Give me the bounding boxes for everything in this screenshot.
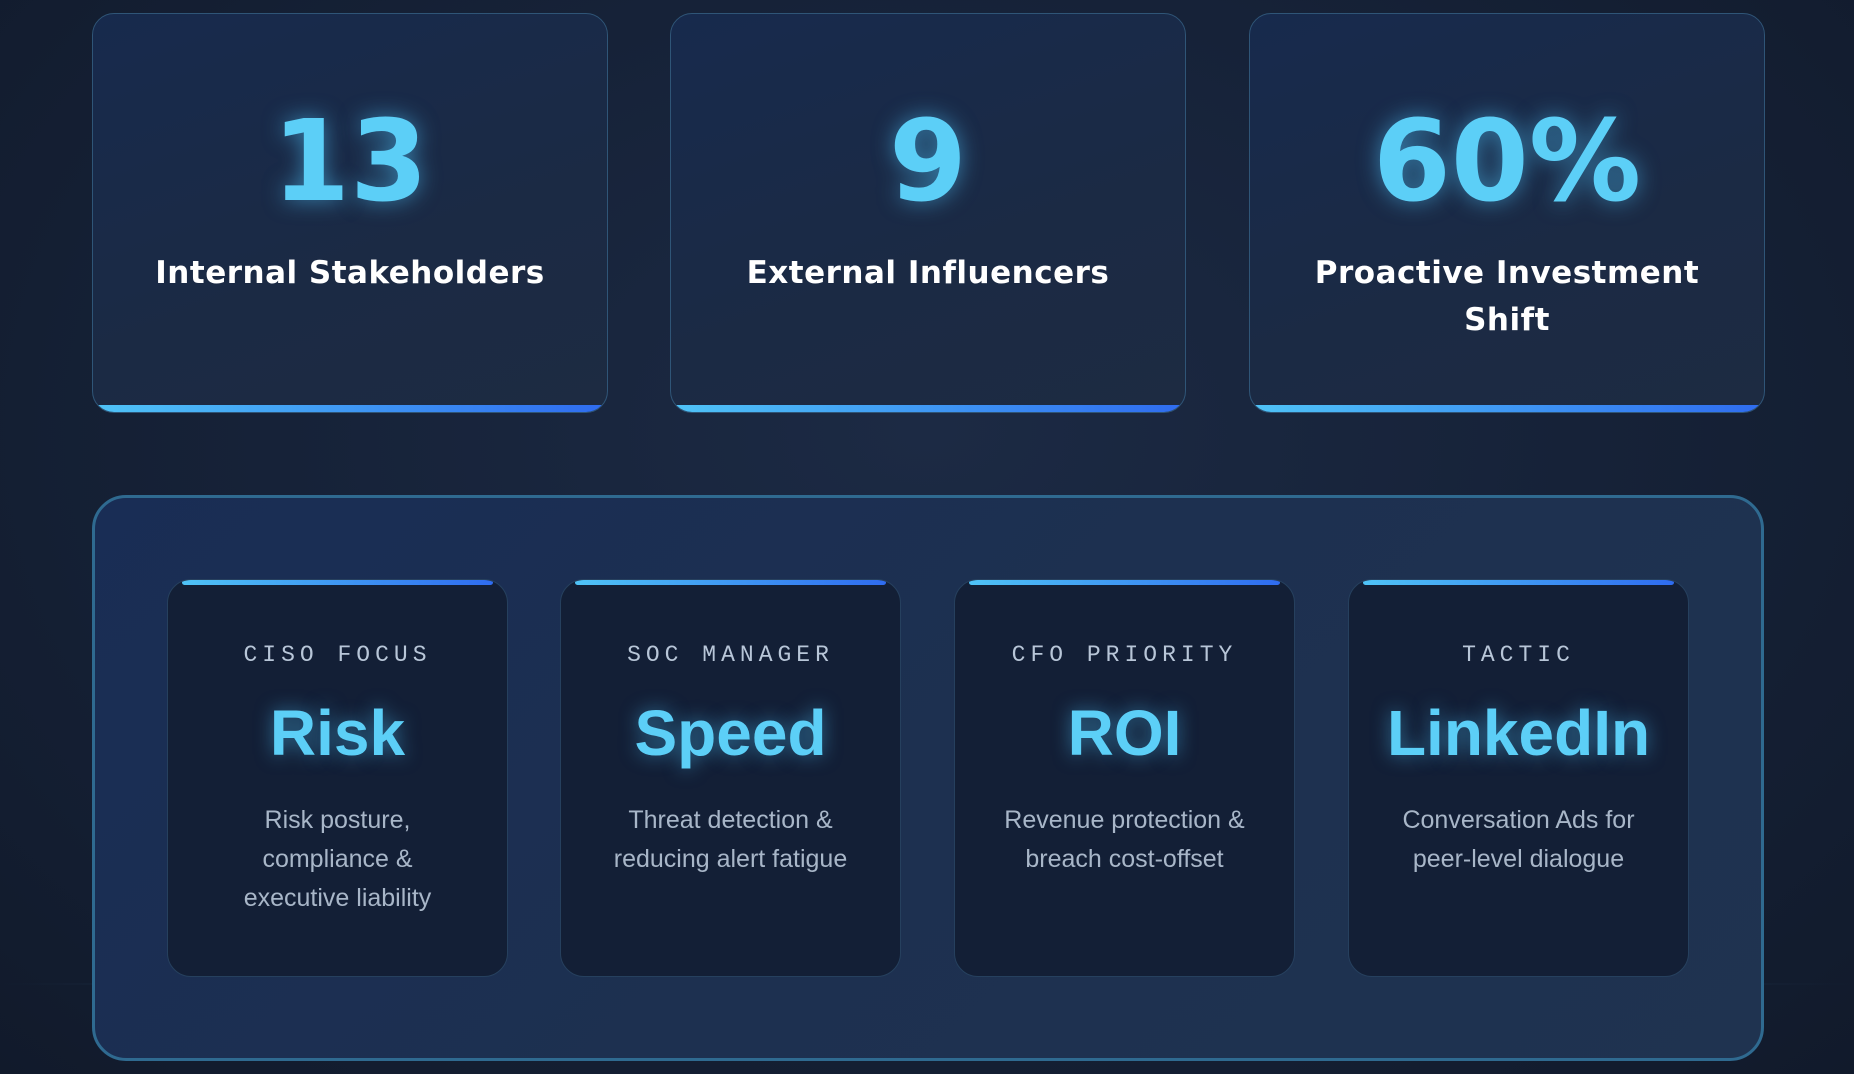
card: SOC manager: Speed bbox=[634, 697, 827, 769]
card: CISO focus: CISO FOCUS bbox=[243, 642, 432, 668]
stat card: external influencers: External Influencers bbox=[747, 255, 1109, 291]
card: CISO focus: Risk bbox=[270, 697, 405, 769]
card: CISO focus: Risk posture, compliance & executive liability bbox=[244, 806, 431, 912]
card: tactic bbox=[1348, 579, 1689, 977]
stat card: internal stakeholders bbox=[92, 13, 608, 413]
card: tactic: TACTIC bbox=[1462, 642, 1575, 668]
card: tactic: Conversation Ads for peer-level dialogue bbox=[1402, 806, 1635, 873]
stat card: proactive investment shift: 60% bbox=[1373, 97, 1641, 227]
card: SOC manager: Threat detection & reducing alert fatigue bbox=[614, 806, 847, 873]
card: SOC manager bbox=[560, 579, 901, 977]
stat card: internal stakeholders: Internal Stakeholders bbox=[155, 255, 545, 291]
panel: focus areas bbox=[92, 495, 1764, 1061]
card: CFO priority: Revenue protection & breach cost-offset bbox=[1004, 806, 1245, 873]
card: CFO priority: CFO PRIORITY bbox=[1012, 642, 1237, 668]
card: CISO focus bbox=[167, 579, 508, 977]
stat card: external influencers: 9 bbox=[889, 97, 967, 227]
card: SOC manager: SOC MANAGER bbox=[627, 642, 834, 668]
stat card: external influencers bbox=[670, 13, 1186, 413]
card: CFO priority: ROI bbox=[1068, 697, 1181, 769]
stat card: proactive investment shift: Proactive Investment Shift bbox=[1315, 255, 1699, 338]
card: CFO priority bbox=[954, 579, 1295, 977]
stat card: internal stakeholders: 13 bbox=[272, 97, 428, 227]
stat card: proactive investment shift bbox=[1249, 13, 1765, 413]
card: tactic: LinkedIn bbox=[1387, 697, 1650, 769]
divider line bbox=[0, 983, 1854, 985]
